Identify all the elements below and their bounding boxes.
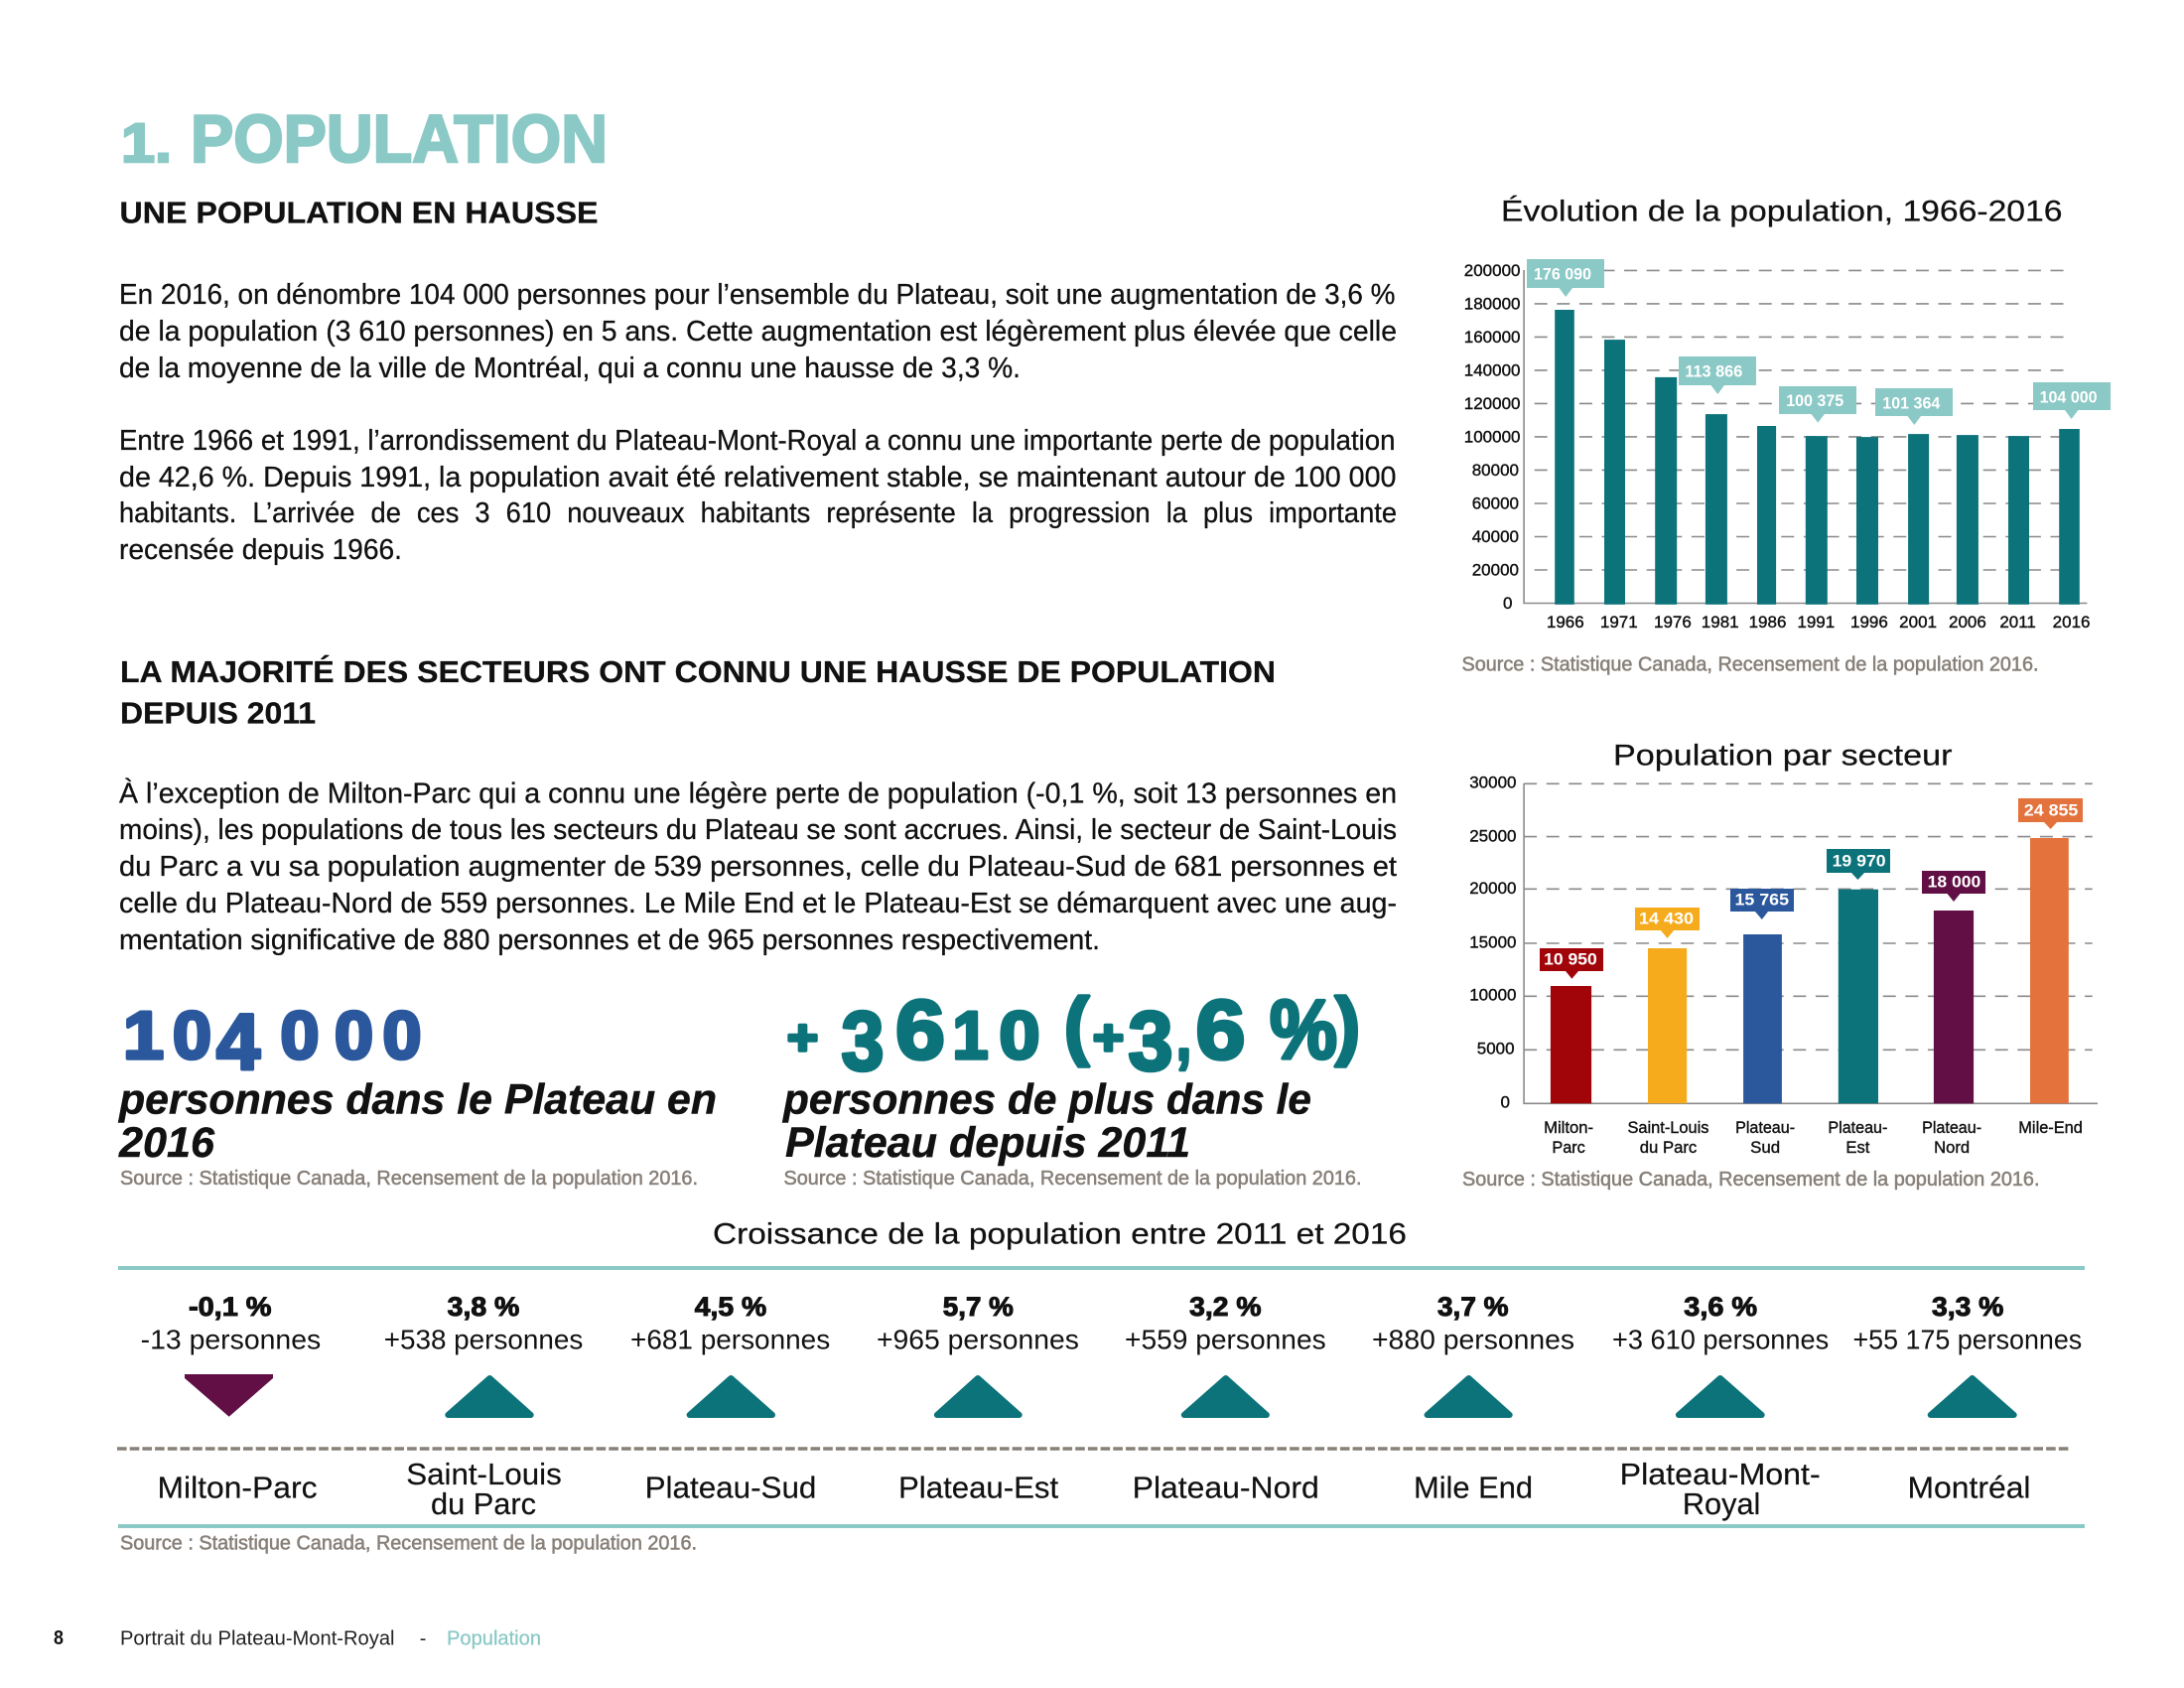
bar chart: évolution de la population: 1971 bbox=[1600, 613, 1638, 632]
column: Plateau-Sud: Plateau-Sud bbox=[645, 1470, 816, 1505]
column: Saint-Louis du Parc: du Parc bbox=[431, 1486, 536, 1521]
callout: 24 855: 24 855 bbox=[2024, 802, 2078, 820]
bar chart: évolution de la population: 20000 bbox=[1472, 560, 1519, 580]
text block: introduction: habitants. L’arrivée de ces 3 610 nouveaux habitants représente la progression la plus importante bbox=[119, 497, 1397, 529]
bar chart: évolution de la population: 160000 bbox=[1464, 328, 1521, 347]
heading: majorité des secteurs bbox=[120, 654, 1276, 731]
callout: 18 000 bbox=[1922, 871, 1985, 902]
bar chart: évolution de la population: 120000 bbox=[1464, 394, 1521, 413]
column: Plateau-Mont-Royal: Plateau-Mont- bbox=[1620, 1457, 1821, 1491]
column: Mile End: Mile End bbox=[1414, 1470, 1533, 1505]
panel: croissance de la population bbox=[117, 1266, 2085, 1528]
column: Plateau-Est: +965 personnes bbox=[877, 1325, 1079, 1354]
bar chart: évolution de la population: 200000 bbox=[1464, 261, 1521, 280]
key figure: + 3 610 (+3,6 %): 0 bbox=[999, 998, 1040, 1073]
callout: 104 000: 104 000 bbox=[2040, 388, 2098, 406]
text block: secteurs: celle du Plateau-Nord de 559 personnes. Le Mile End et le Plateau-Est se démarquent avec une aug- bbox=[119, 888, 1397, 919]
text block: introduction: de la moyenne de la ville de Montréal, qui a connu une hausse de 3,3 %. bbox=[119, 352, 1021, 384]
bar chart: évolution de la population: 1981 bbox=[1702, 613, 1739, 632]
text block: secteurs: À l’exception de Milton-Parc qui a connu une légère perte de population (-0,1 %, soit 13 personnes en bbox=[119, 776, 1397, 810]
callout: 19 970: 19 970 bbox=[1833, 852, 1886, 870]
column: Plateau-Est bbox=[877, 1292, 1079, 1505]
key figure: 104 000: 0 bbox=[335, 998, 373, 1073]
key figure: + 3 610 (+3,6 %): 6 bbox=[895, 983, 945, 1076]
source: secteurs: Source : Statistique Canada, Recensement de la population 2016. bbox=[1462, 1168, 2039, 1191]
source: 104 000: Source : Statistique Canada, Recensement de la population 2016. bbox=[120, 1167, 698, 1190]
key figure: 104 000: 0 bbox=[280, 998, 320, 1073]
bar chart: évolution de la population: 80000 bbox=[1472, 461, 1519, 480]
text block: introduction: recensée depuis 1966. bbox=[119, 534, 402, 566]
text block: secteurs bbox=[119, 776, 1397, 956]
bar chart: évolution de la population bbox=[1464, 259, 2111, 632]
column: Montréal bbox=[1852, 1292, 2082, 1505]
key figure: + 3 610 (+3,6 %): + bbox=[787, 1010, 818, 1065]
callout: 104 000 bbox=[2033, 382, 2111, 419]
bar chart: évolution de la population: 2011 bbox=[1999, 613, 2036, 632]
bar chart: évolution de la population: 140000 bbox=[1464, 361, 1521, 379]
bar chart: évolution de la population: 1986 bbox=[1749, 613, 1786, 632]
text block: introduction: Entre 1966 et 1991, l’arrondissement du Plateau-Mont-Royal a connu une importante perte de population bbox=[119, 425, 1396, 457]
callout: 176 090 bbox=[1527, 259, 1604, 297]
bar chart: population par secteur: Saint-Louis bbox=[1628, 1118, 1709, 1137]
callout: 113 866 bbox=[1679, 356, 1756, 394]
key figure: + 3 610 (+3,6 %): 6 bbox=[1195, 983, 1245, 1076]
heading: majorité des secteurs: DEPUIS 2011 bbox=[120, 695, 316, 731]
footer: 8 bbox=[54, 1627, 64, 1649]
column: Milton-Parc: -13 personnes bbox=[141, 1325, 321, 1354]
column: Saint-Louis du Parc: +538 personnes bbox=[384, 1325, 583, 1354]
key figure: + 3 610 (+3,6 %): , bbox=[1176, 999, 1191, 1074]
key figure: + 3 610 (+3,6 %): % bbox=[1270, 983, 1337, 1076]
bar chart: population par secteur: Mile-End bbox=[2018, 1118, 2083, 1137]
bar chart: population par secteur: 25000 bbox=[1469, 826, 1517, 845]
text block: secteurs: moins), les populations de tous les secteurs du Plateau se sont accrues. Ainsi, le secteur de Saint-Louis bbox=[119, 814, 1397, 846]
text block: introduction: de la population (3 610 personnes) en 5 ans. Cette augmentation est légèrement plus élevée que celle bbox=[119, 316, 1397, 348]
caption: personnes dans le Plateau: personnes dans le Plateau en bbox=[118, 1076, 717, 1124]
column: Plateau-Nord: Plateau-Nord bbox=[1133, 1470, 1319, 1505]
key figure: 104 000: 4 bbox=[216, 997, 260, 1086]
column: Saint-Louis du Parc: 3,8 % bbox=[448, 1292, 519, 1322]
heading: majorité des secteurs: LA MAJORITÉ DES SECTEURS ONT CONNU UNE HAUSSE DE POPULATION bbox=[120, 654, 1276, 689]
chart title: population par secteur: Population par secteur bbox=[1613, 739, 1952, 773]
text block: introduction: En 2016, on dénombre 104 000 personnes pour l’ensemble du Plateau, soit une augmentation de 3,6 % bbox=[119, 279, 1396, 311]
bar chart: évolution de la population: 1996 bbox=[1850, 613, 1888, 632]
bar chart: population par secteur: Sud bbox=[1750, 1138, 1780, 1157]
source: croissance: Source : Statistique Canada, Recensement de la population 2016. bbox=[120, 1532, 697, 1555]
column: Plateau-Est: Plateau-Est bbox=[898, 1470, 1059, 1505]
bar chart: population par secteur: 0 bbox=[1501, 1093, 1510, 1112]
bar chart: évolution de la population: 1991 bbox=[1797, 613, 1835, 632]
bar chart: population par secteur: Nord bbox=[1934, 1138, 1970, 1157]
title: POPULATION bbox=[191, 101, 608, 177]
column: Plateau-Sud: 4,5 % bbox=[695, 1292, 766, 1322]
footer bbox=[54, 1626, 541, 1650]
chart title: évolution: Évolution de la population, 1966-2016 bbox=[1501, 195, 2063, 228]
text block: secteurs: du Parc a vu sa population augmenter de 539 personnes, celle du Plateau-Sud de 681 personnes et bbox=[119, 851, 1397, 883]
callout: 14 430: 14 430 bbox=[1639, 911, 1694, 928]
key figure: 104 000: 0 bbox=[173, 998, 211, 1073]
source: 3 610: Source : Statistique Canada, Recensement de la population 2016. bbox=[784, 1167, 1362, 1190]
bar chart: évolution de la population: 2006 bbox=[1949, 613, 1986, 632]
bar chart: évolution de la population: 2016 bbox=[2053, 613, 2091, 632]
column: Plateau-Nord: +559 personnes bbox=[1125, 1325, 1326, 1354]
column: Milton-Parc bbox=[141, 1292, 321, 1505]
column: Milton-Parc: Milton-Parc bbox=[157, 1470, 318, 1505]
key figure: + 3 610 (+3,6 %): + bbox=[1093, 1010, 1124, 1065]
caption: personnes de plus: Plateau depuis 2011 bbox=[785, 1119, 1190, 1167]
callout: 113 866: 113 866 bbox=[1685, 363, 1742, 381]
callout: 10 950: 10 950 bbox=[1544, 951, 1597, 969]
column: Plateau-Nord: 3,2 % bbox=[1189, 1292, 1261, 1322]
callout: 100 375: 100 375 bbox=[1786, 392, 1843, 410]
bar chart: population par secteur bbox=[1469, 773, 2098, 1157]
key figure: + 3 610 (+3,6 %): 3 bbox=[1128, 995, 1173, 1088]
column: Milton-Parc: -0,1 % bbox=[189, 1292, 272, 1322]
column: Plateau-Est: 5,7 % bbox=[943, 1292, 1014, 1322]
bar chart: population par secteur: Milton- bbox=[1544, 1118, 1593, 1137]
caption: personnes dans le Plateau bbox=[118, 1076, 717, 1167]
caption: personnes dans le Plateau: 2016 bbox=[118, 1119, 215, 1167]
bar chart: évolution de la population: 1976 bbox=[1654, 613, 1692, 632]
callout: 10 950 bbox=[1540, 948, 1603, 979]
column: Saint-Louis du Parc: Saint-Louis bbox=[406, 1457, 562, 1491]
footer: Population bbox=[447, 1626, 541, 1650]
column: Plateau-Sud: +681 personnes bbox=[630, 1325, 830, 1354]
column: Mile End: +880 personnes bbox=[1372, 1325, 1574, 1354]
callout: 24 855 bbox=[2018, 798, 2083, 829]
source: évolution: Source : Statistique Canada, Recensement de la population 2016. bbox=[1461, 653, 2039, 675]
key figure: + 3 610 (+3,6 %): 3 bbox=[842, 995, 884, 1088]
title: 1. bbox=[121, 111, 172, 174]
callout: 14 430 bbox=[1635, 908, 1700, 938]
bar chart: évolution de la population: 180000 bbox=[1464, 294, 1521, 314]
column: Plateau-Mont-Royal: +3 610 personnes bbox=[1612, 1325, 1829, 1354]
bar chart: évolution de la population: 100000 bbox=[1464, 427, 1521, 447]
bar chart: population par secteur: Plateau- bbox=[1828, 1118, 1887, 1137]
bar chart: évolution de la population: 0 bbox=[1503, 594, 1513, 613]
caption: personnes de plus bbox=[782, 1076, 1311, 1167]
bar chart: population par secteur: Est bbox=[1845, 1138, 1870, 1157]
heading: croissance: Croissance de la population entre 2011 et 2016 bbox=[713, 1217, 1407, 1251]
bar chart: population par secteur: 30000 bbox=[1469, 773, 1517, 792]
callout: 101 364 bbox=[1875, 388, 1953, 425]
column: Plateau-Mont-Royal bbox=[1612, 1292, 1829, 1521]
key figure: + 3 610 (+3,6 %) bbox=[787, 983, 1360, 1088]
column: Montréal: +55 175 personnes bbox=[1852, 1325, 2082, 1354]
bar chart: population par secteur: Parc bbox=[1552, 1138, 1585, 1157]
caption: personnes de plus: personnes de plus dans le bbox=[782, 1076, 1311, 1124]
bar chart: population par secteur: 5000 bbox=[1477, 1039, 1515, 1058]
callout: 15 765: 15 765 bbox=[1735, 892, 1789, 910]
callout: 101 364: 101 364 bbox=[1882, 394, 1941, 412]
column: Plateau-Nord bbox=[1125, 1292, 1326, 1505]
footer: Portrait du Plateau-Mont-Royal bbox=[120, 1626, 395, 1650]
text block: secteurs: mentation significative de 880 personnes et de 965 personnes respectivement. bbox=[119, 924, 1100, 956]
bar chart: évolution de la population: 60000 bbox=[1472, 494, 1519, 512]
footer: - bbox=[420, 1626, 426, 1650]
key figure: 104 000 bbox=[123, 997, 421, 1086]
key figure: + 3 610 (+3,6 %): ) bbox=[1335, 983, 1360, 1067]
callout: 100 375 bbox=[1779, 386, 1856, 423]
bar chart: population par secteur: 10000 bbox=[1469, 985, 1517, 1005]
key figure: + 3 610 (+3,6 %): ( bbox=[1064, 983, 1090, 1067]
key figure: 104 000: 1 bbox=[123, 998, 164, 1073]
column: Montréal: 3,3 % bbox=[1932, 1292, 2003, 1322]
column: Mile End bbox=[1372, 1292, 1574, 1505]
bar chart: évolution de la population: 1966 bbox=[1547, 613, 1584, 632]
bar chart: population par secteur: Plateau- bbox=[1922, 1118, 1981, 1137]
column: Plateau-Mont-Royal: 3,6 % bbox=[1684, 1292, 1757, 1322]
column: Montréal: Montréal bbox=[1908, 1470, 2031, 1505]
column: Saint-Louis du Parc bbox=[384, 1292, 583, 1521]
key figure: 104 000: 0 bbox=[383, 998, 421, 1073]
bar chart: évolution de la population: 2001 bbox=[1899, 613, 1937, 632]
text block: introduction bbox=[119, 279, 1397, 566]
column: Plateau-Sud bbox=[630, 1292, 830, 1505]
column: Mile End: 3,7 % bbox=[1437, 1292, 1509, 1322]
heading: une population en hausse: UNE POPULATION EN HAUSSE bbox=[119, 195, 598, 230]
bar chart: population par secteur: du Parc bbox=[1640, 1138, 1698, 1157]
text block: introduction: de 42,6 %. Depuis 1991, la population avait été relativement stable, se maintenant autour de 100 000 bbox=[119, 462, 1396, 493]
column: Plateau-Mont-Royal: Royal bbox=[1683, 1486, 1760, 1521]
callout: 176 090: 176 090 bbox=[1534, 266, 1591, 284]
bar chart: population par secteur: 20000 bbox=[1469, 879, 1517, 898]
bar chart: population par secteur: 15000 bbox=[1469, 933, 1517, 951]
callout: 18 000: 18 000 bbox=[1928, 874, 1980, 892]
bar chart: évolution de la population: 40000 bbox=[1472, 527, 1519, 546]
key figure: + 3 610 (+3,6 %): 1 bbox=[953, 998, 989, 1073]
callout: 19 970 bbox=[1827, 849, 1890, 880]
bar chart: population par secteur: Plateau- bbox=[1735, 1118, 1795, 1137]
callout: 15 765 bbox=[1730, 889, 1794, 919]
